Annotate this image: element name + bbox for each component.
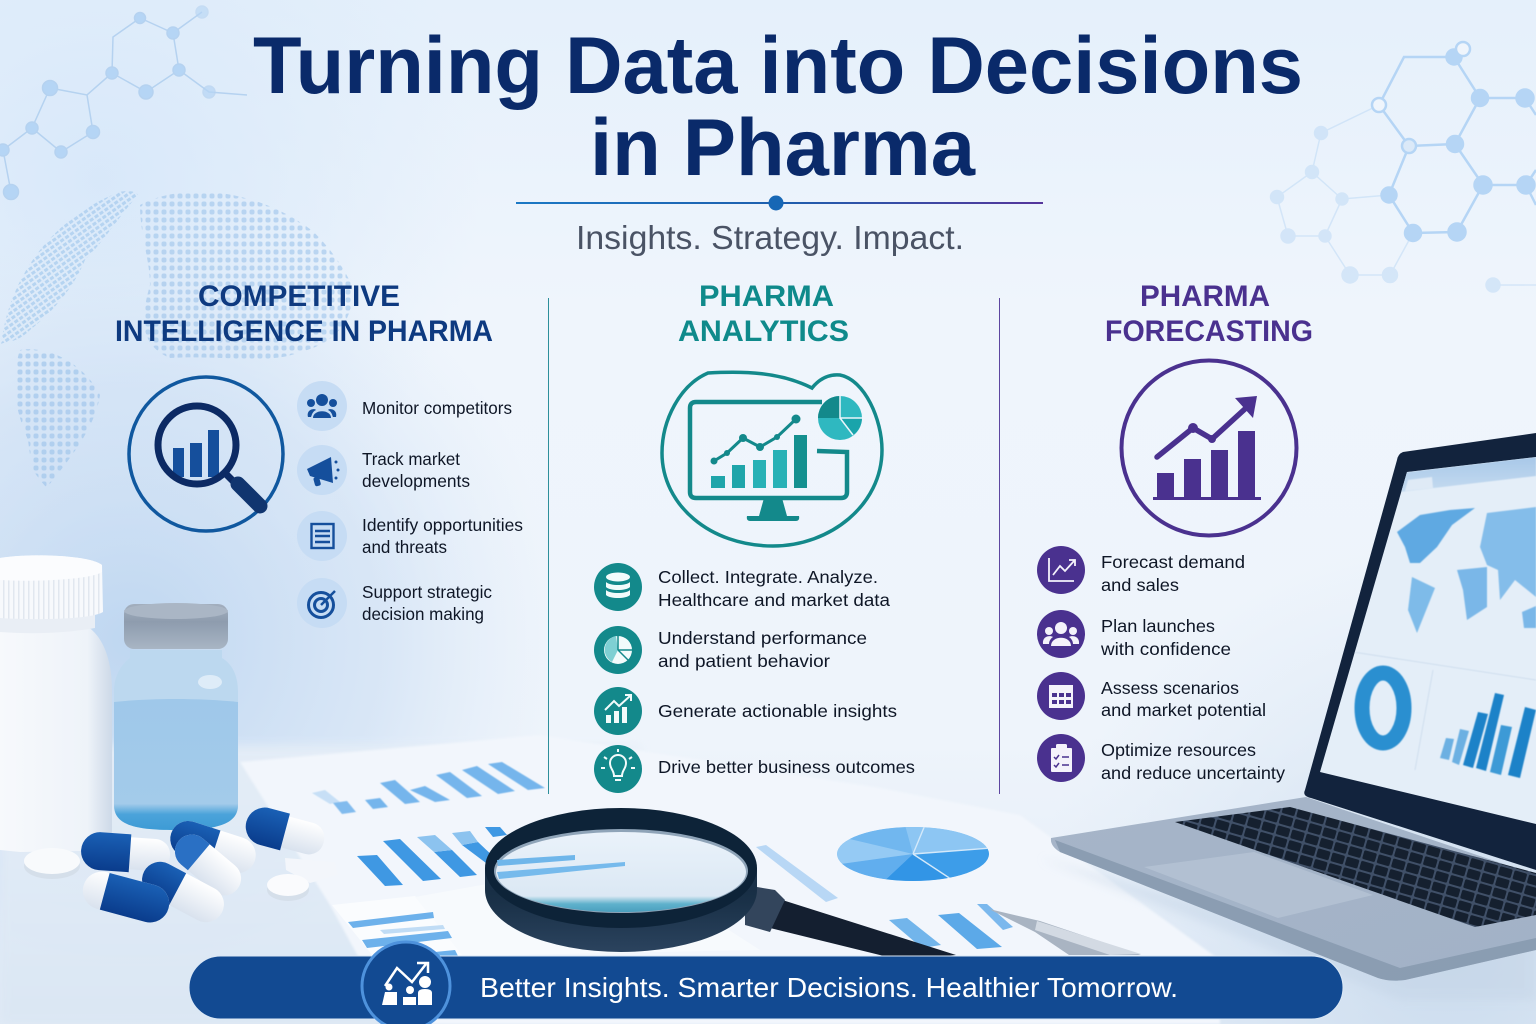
heading: competitive intelligence: INTELLIGENCE IN PHARMA	[115, 315, 493, 348]
heading: pharma analytics	[678, 280, 849, 348]
photo: report papers with charts	[240, 735, 1220, 1024]
item: track market developments: developments	[362, 471, 470, 491]
item: support strategic decision making: Support strategic	[362, 582, 492, 602]
item: optimize resources: Optimize resources	[1101, 740, 1256, 760]
item: collect integrate analyze: Healthcare and market data	[658, 590, 890, 610]
item: support strategic decision making	[297, 578, 492, 628]
item: forecast demand: Forecast demand	[1101, 552, 1245, 572]
item: assess scenarios: and market potential	[1101, 700, 1266, 720]
faded upper bars	[312, 762, 545, 814]
item: assess scenarios: Assess scenarios	[1101, 678, 1239, 698]
column dividers	[548, 298, 1000, 794]
panel: pharma analytics	[594, 280, 915, 793]
title: in Pharma	[590, 103, 976, 193]
side strip on right paper	[756, 845, 838, 902]
heading: competitive intelligence	[115, 280, 493, 348]
heading: pharma forecasting: FORECASTING	[1105, 315, 1313, 348]
item: collect integrate analyze	[594, 563, 890, 611]
icon: banner growth and people	[362, 942, 450, 1024]
subtitle: Insights. Strategy. Impact.	[576, 219, 964, 256]
item: understand performance: Understand performance	[658, 628, 867, 648]
item: identify opportunities and threats: Identify opportunities	[362, 515, 523, 535]
item: drive business outcomes: Drive better business outcomes	[658, 757, 915, 777]
item: identify opportunities and threats	[297, 511, 523, 561]
title: Turning Data into Decisions	[253, 21, 1303, 111]
heading: pharma forecasting	[1105, 280, 1313, 348]
banner text: Better Insights. Smarter Decisions. Healthier Tomorrow.	[480, 972, 1178, 1003]
heading: competitive intelligence: COMPETITIVE	[198, 280, 400, 313]
item: support strategic decision making: decision making	[362, 604, 484, 624]
item: plan launches	[1037, 610, 1231, 659]
photo: laptop	[1040, 433, 1536, 1000]
photo: magnifying glass	[485, 808, 956, 960]
photo: pills and tablets	[24, 803, 338, 929]
item: forecast demand: and sales	[1101, 575, 1179, 595]
item: optimize resources	[1037, 734, 1285, 783]
panel: pharma forecasting	[1037, 280, 1313, 783]
title	[253, 21, 1303, 193]
mid paper bars	[357, 827, 507, 886]
item: track market developments: Track market	[362, 449, 460, 469]
item: generate insights	[594, 687, 897, 735]
item: plan launches: with confidence	[1100, 639, 1231, 659]
photo: pen	[989, 909, 1141, 955]
lower right bars	[889, 904, 1013, 949]
panel: competitive intelligence	[115, 280, 523, 628]
item: drive business outcomes	[594, 745, 915, 793]
item: track market developments	[297, 445, 470, 495]
item: understand performance	[594, 626, 867, 674]
item: monitor competitors: Monitor competitors	[362, 398, 512, 418]
item: plan launches: Plan launches	[1101, 616, 1215, 636]
molecule: top right	[1270, 42, 1536, 292]
item: forecast demand	[1037, 546, 1245, 595]
item: monitor competitors	[297, 381, 512, 431]
item: optimize resources: and reduce uncertainty	[1101, 763, 1285, 783]
icon: rising bars and arrow	[1122, 360, 1296, 536]
background dotted globe	[0, 191, 352, 490]
item: assess scenarios	[1037, 672, 1266, 720]
photo: white bottle	[0, 555, 112, 852]
icon: magnifier over bar chart	[129, 377, 283, 531]
heading: pharma analytics: ANALYTICS	[678, 315, 849, 348]
title divider with dot	[516, 196, 1043, 210]
heading: pharma forecasting: PHARMA	[1140, 280, 1270, 313]
item: generate insights: Generate actionable insights	[658, 701, 897, 721]
photo: glass vial	[114, 603, 238, 830]
item: understand performance: and patient behavior	[658, 651, 830, 671]
icon: monitor with charts	[662, 372, 882, 546]
molecule: top left	[0, 6, 247, 200]
footer banner	[189, 942, 1343, 1024]
item: collect integrate analyze: Collect. Integrate. Analyze.	[658, 567, 878, 587]
heading: pharma analytics: PHARMA	[699, 280, 834, 313]
item: identify opportunities and threats: and threats	[362, 537, 447, 557]
pie chart on paper	[837, 827, 989, 881]
